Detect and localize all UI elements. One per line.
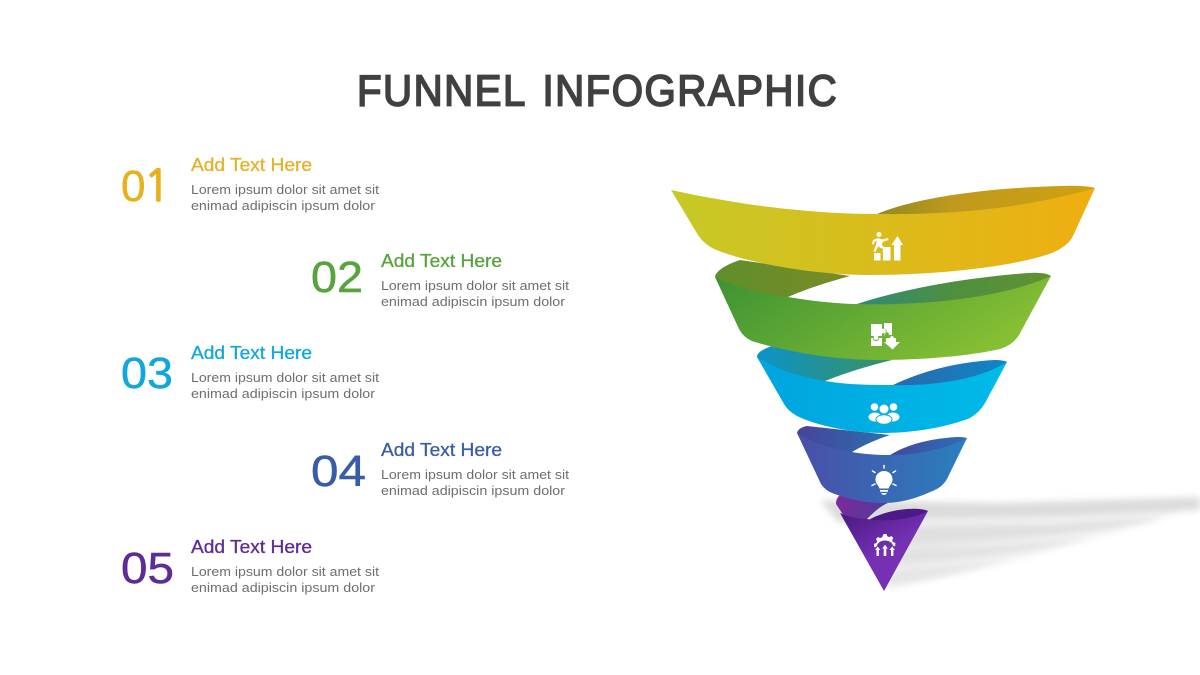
body 02: enimad adipiscin ipsum dolor	[381, 295, 565, 309]
heading 03: Add Text Here	[191, 343, 312, 363]
text block 03	[121, 343, 380, 401]
number 01	[121, 162, 170, 211]
body 02	[381, 279, 570, 309]
number 02: 02	[311, 253, 363, 302]
body 01: enimad adipiscin ipsum dolor	[191, 199, 375, 213]
body 05: enimad adipiscin ipsum dolor	[191, 581, 375, 595]
title: FUNNEL INFOGRAPHIC	[357, 66, 838, 115]
body 03: Lorem ipsum dolor sit amet sit	[191, 371, 380, 385]
band 2 green with puzzle icon	[715, 260, 1051, 360]
body 04: Lorem ipsum dolor sit amet sit	[381, 468, 570, 482]
heading 01: Add Text Here	[191, 155, 312, 175]
body 01	[191, 183, 380, 213]
band 4 indigo with bulb icon	[797, 426, 967, 503]
number 05: 05	[121, 544, 174, 593]
heading 04: Add Text Here	[381, 440, 502, 460]
body 02: Lorem ipsum dolor sit amet sit	[381, 279, 570, 293]
text block 05	[121, 537, 380, 595]
number 03: 03	[121, 349, 173, 398]
icon: person climbing steps with arrow	[872, 232, 903, 260]
text block 04	[311, 440, 570, 498]
band 1 yellow with growth icon	[671, 186, 1095, 275]
text block 02	[311, 251, 570, 309]
body 05	[191, 565, 380, 595]
body 03	[191, 371, 380, 401]
funnel	[671, 186, 1095, 591]
band 3 blue with people icon	[757, 346, 1007, 433]
funnel shadow	[820, 497, 1200, 588]
heading 05: Add Text Here	[191, 537, 312, 557]
band 5 purple with gear icon	[836, 494, 928, 591]
body 04: enimad adipiscin ipsum dolor	[381, 484, 565, 498]
heading 02: Add Text Here	[381, 251, 502, 271]
icon: gear with arrows	[874, 534, 895, 556]
body 03: enimad adipiscin ipsum dolor	[191, 387, 375, 401]
number 01: 0	[121, 162, 145, 211]
body 04	[381, 468, 570, 498]
number 04: 04	[311, 447, 366, 496]
number 01: 1	[144, 165, 170, 208]
icon: puzzle pieces	[871, 323, 900, 350]
body 01: Lorem ipsum dolor sit amet sit	[191, 183, 380, 197]
icon: team of people	[868, 403, 900, 424]
text block 01	[121, 155, 380, 213]
icon: light bulb	[872, 466, 896, 495]
body 05: Lorem ipsum dolor sit amet sit	[191, 565, 380, 579]
